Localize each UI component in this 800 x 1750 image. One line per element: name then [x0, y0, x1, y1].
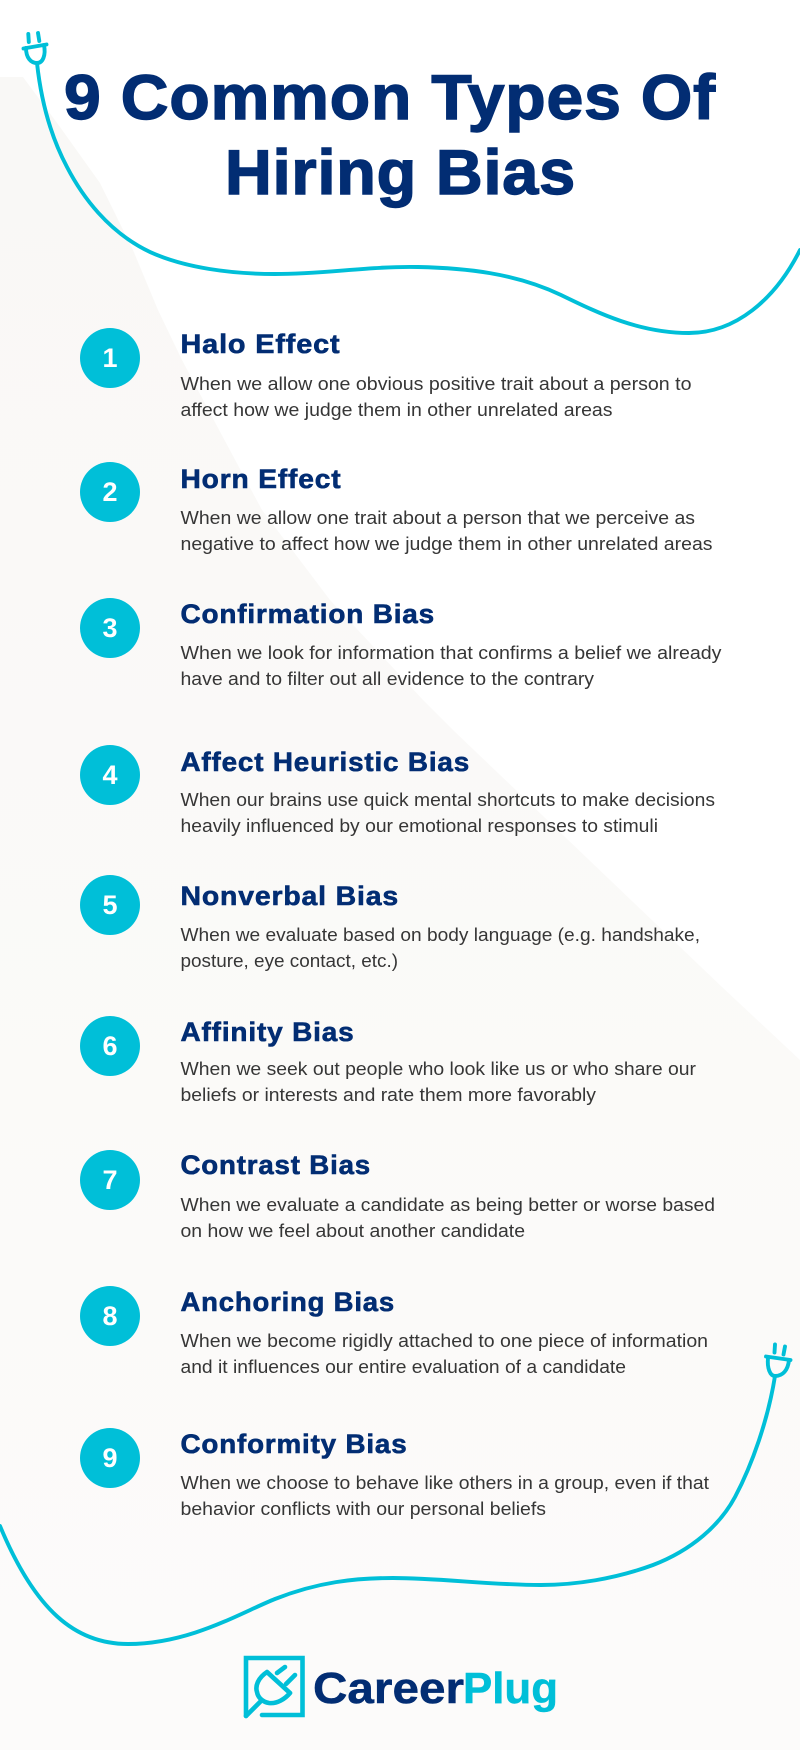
heading: Horn Effect: [180, 464, 342, 494]
title: Hiring Bias: [225, 138, 576, 208]
logo wordmark: [313, 1664, 558, 1713]
number badge 9: 9: [102, 1443, 118, 1473]
description: have and to filter out all evidence to the contrary: [180, 668, 595, 689]
bottom cable with plug: [0, 1344, 790, 1644]
description: When we look for information that confirms a belief we already: [180, 642, 722, 663]
title: [64, 63, 716, 208]
item 3: Confirmation Bias: [80, 598, 722, 689]
description: affect how we judge them in other unrelated areas: [180, 399, 612, 420]
top cable with plug: [24, 33, 800, 333]
heading: Anchoring Bias: [180, 1287, 395, 1317]
item 5: Nonverbal Bias: [80, 875, 700, 971]
number badge 8: 8: [102, 1301, 118, 1331]
item 8: Anchoring Bias: [80, 1286, 708, 1377]
description: When we evaluate based on body language (e.g. handshake,: [180, 924, 700, 945]
description: behavior conflicts with our personal beliefs: [180, 1498, 546, 1519]
number badge 2: [80, 462, 140, 522]
number badge 7: [80, 1150, 140, 1210]
heading: Affinity Bias: [180, 1017, 354, 1047]
number badge 9: [80, 1428, 140, 1488]
description: and it influences our entire evaluation of a candidate: [180, 1356, 626, 1377]
number badge 5: [80, 875, 140, 935]
item 7: Contrast Bias: [80, 1150, 715, 1241]
number badge 5: 5: [102, 890, 118, 920]
number badge 1: [80, 328, 140, 388]
description: When we allow one obvious positive trait about a person to: [180, 373, 692, 394]
title: 9 Common Types Of: [64, 63, 716, 133]
logo wordmark: Plug: [463, 1664, 558, 1713]
description: posture, eye contact, etc.): [180, 950, 398, 971]
number badge 2: 2: [102, 477, 118, 507]
logo: CareerPlug: [246, 1658, 558, 1716]
description: on how we feel about another candidate: [180, 1220, 525, 1241]
item 9: Conformity Bias: [80, 1428, 709, 1519]
description: [180, 507, 712, 554]
number badge 1: 1: [102, 343, 118, 373]
description: heavily influenced by our emotional responses to stimuli: [180, 815, 658, 836]
description: When we allow one trait about a person that we perceive as: [180, 507, 695, 528]
description: [180, 1472, 709, 1519]
item 6: Affinity Bias: [80, 1016, 696, 1105]
description: When our brains use quick mental shortcuts to make decisions: [180, 789, 715, 810]
number badge 6: 6: [102, 1031, 118, 1061]
number badge 6: [80, 1016, 140, 1076]
description: [180, 1058, 696, 1105]
description: [180, 1330, 708, 1377]
item 4: Affect Heuristic Bias: [80, 745, 715, 836]
heading: Conformity Bias: [180, 1429, 408, 1459]
description: [180, 924, 700, 971]
description: When we choose to behave like others in a group, even if that: [180, 1472, 709, 1493]
item 1: Halo Effect: [80, 328, 692, 420]
description: [180, 789, 715, 836]
description: [180, 642, 722, 689]
description: beliefs or interests and rate them more favorably: [180, 1084, 597, 1105]
description: When we seek out people who look like us or who share our: [180, 1058, 696, 1079]
number badge 8: [80, 1286, 140, 1346]
heading: Contrast Bias: [180, 1150, 371, 1180]
number badge 7: 7: [102, 1165, 118, 1195]
number badge 4: [80, 745, 140, 805]
logo wordmark: Career: [313, 1664, 464, 1713]
heading: Halo Effect: [180, 329, 340, 359]
description: When we evaluate a candidate as being better or worse based: [180, 1194, 715, 1215]
description: When we become rigidly attached to one piece of information: [180, 1330, 708, 1351]
heading: Confirmation Bias: [180, 599, 435, 629]
heading: Affect Heuristic Bias: [180, 747, 470, 777]
heading: Nonverbal Bias: [180, 881, 399, 911]
number badge 3: 3: [102, 613, 118, 643]
item 2: Horn Effect: [80, 462, 712, 554]
number badge 3: [80, 598, 140, 658]
description: negative to affect how we judge them in other unrelated areas: [180, 533, 712, 554]
logo icon: plug in speech bubble: [246, 1658, 302, 1716]
number badge 4: 4: [102, 760, 118, 790]
description: [180, 373, 692, 420]
description: [180, 1194, 715, 1241]
